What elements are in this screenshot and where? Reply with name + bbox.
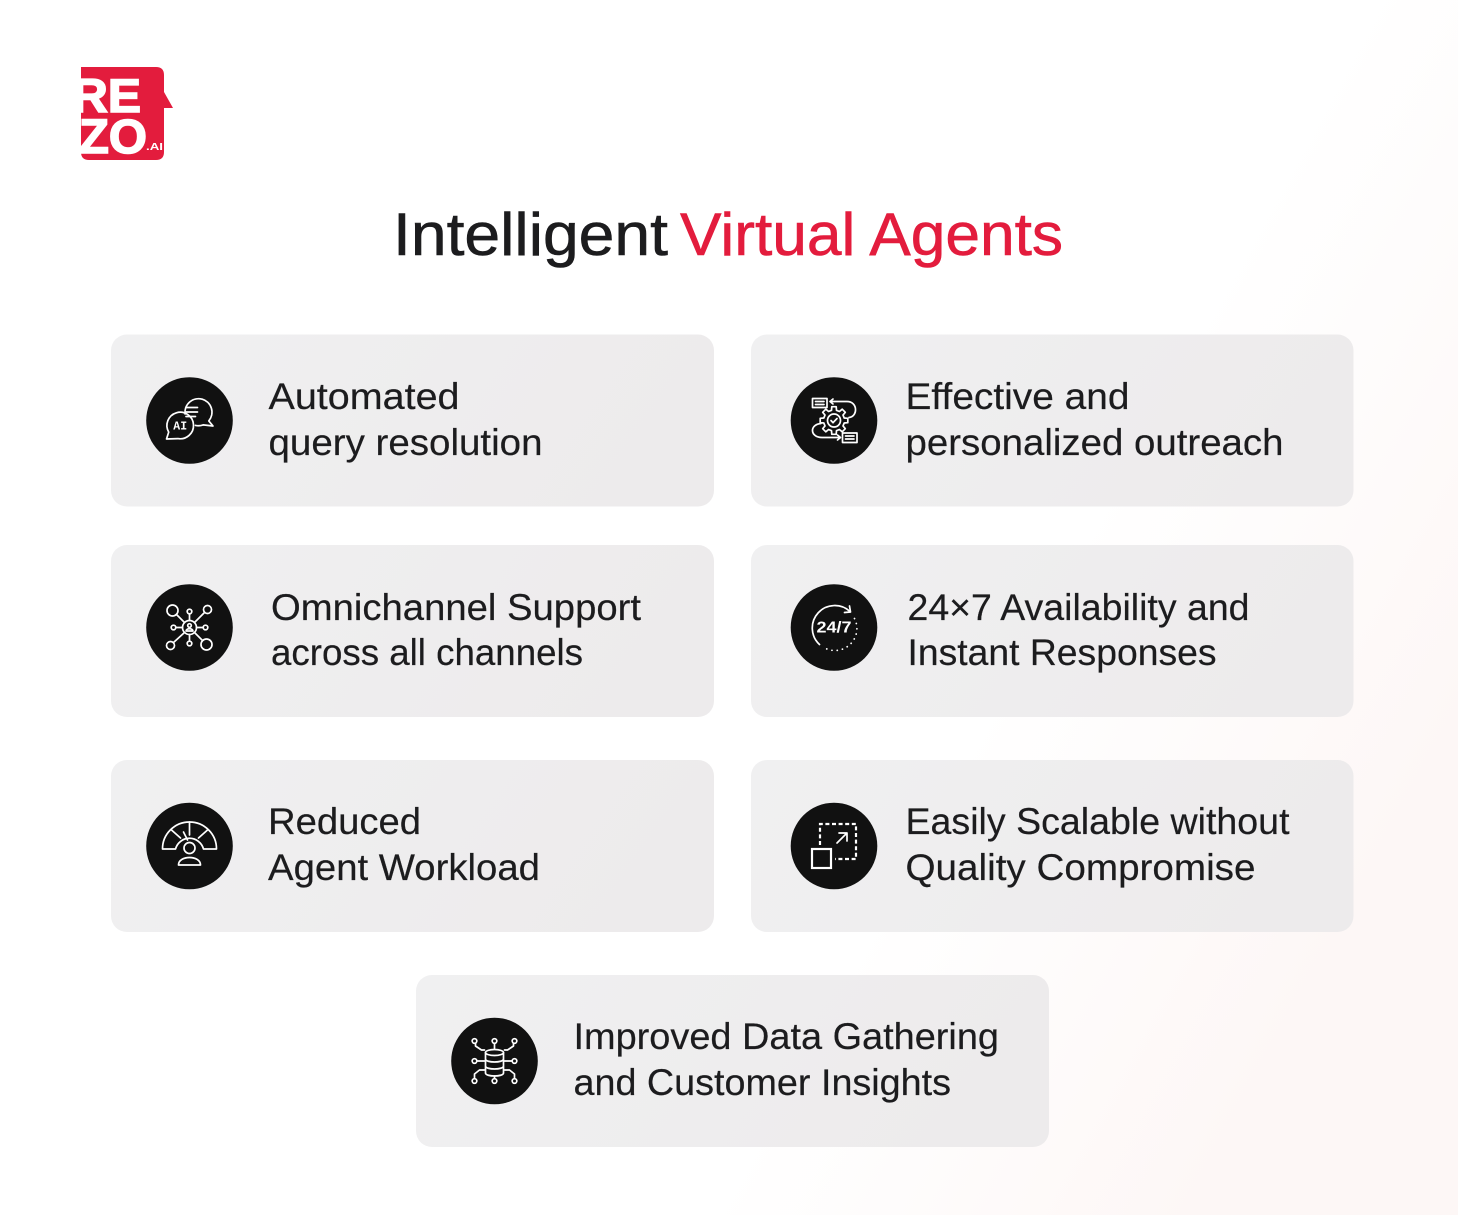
text (906, 376, 1284, 463)
text: Easily Scalable without (906, 801, 1290, 842)
panel: 24x7 availability (751, 545, 1354, 717)
text (906, 801, 1290, 888)
text (268, 801, 540, 888)
icon: network hub (146, 584, 233, 671)
icon: 24/7 clock arrow: 24/7 (816, 620, 852, 636)
icon: AI chat bubbles (146, 377, 233, 464)
text: Reduced (268, 801, 421, 842)
text: query resolution (268, 422, 542, 463)
icon: gear with documents (791, 377, 877, 464)
panel: easily scalable (751, 760, 1354, 932)
icon: 24/7 clock arrow (791, 584, 877, 671)
text: across all channels (271, 632, 583, 673)
text: 24×7 Availability and (908, 587, 1250, 628)
icon: database network (451, 1018, 538, 1104)
text (271, 587, 642, 673)
text: Effective and (906, 376, 1130, 417)
logo: REZO.AI: .AI (146, 142, 163, 153)
logo: REZO.AI (81, 67, 173, 160)
panel: automated query resolution (111, 334, 714, 506)
title: Virtual Agents (680, 201, 1063, 268)
text (268, 376, 542, 463)
panel: effective and personalized outreach (751, 334, 1354, 506)
icon: scale squares (791, 803, 877, 889)
title: Intelligent (393, 201, 668, 268)
icon: gauge with agent (146, 803, 233, 889)
text: Automated (268, 376, 460, 417)
text (574, 1016, 999, 1103)
icon: AI chat bubbles: AI (173, 420, 187, 434)
text (908, 587, 1250, 673)
text: personalized outreach (906, 422, 1284, 463)
panel: improved data gathering (416, 975, 1049, 1147)
panel: reduced agent workload (111, 760, 714, 932)
panel: omnichannel support (111, 545, 714, 717)
text: Quality Compromise (906, 847, 1256, 888)
text: Agent Workload (268, 847, 540, 888)
text: Omnichannel Support (271, 587, 642, 628)
text: Improved Data Gathering (574, 1016, 999, 1057)
logo: REZO.AI: RE (72, 69, 141, 122)
logo: REZO.AI: ZO (79, 111, 147, 164)
title (393, 201, 1063, 268)
text: Instant Responses (908, 632, 1216, 673)
text: and Customer Insights (574, 1062, 951, 1103)
